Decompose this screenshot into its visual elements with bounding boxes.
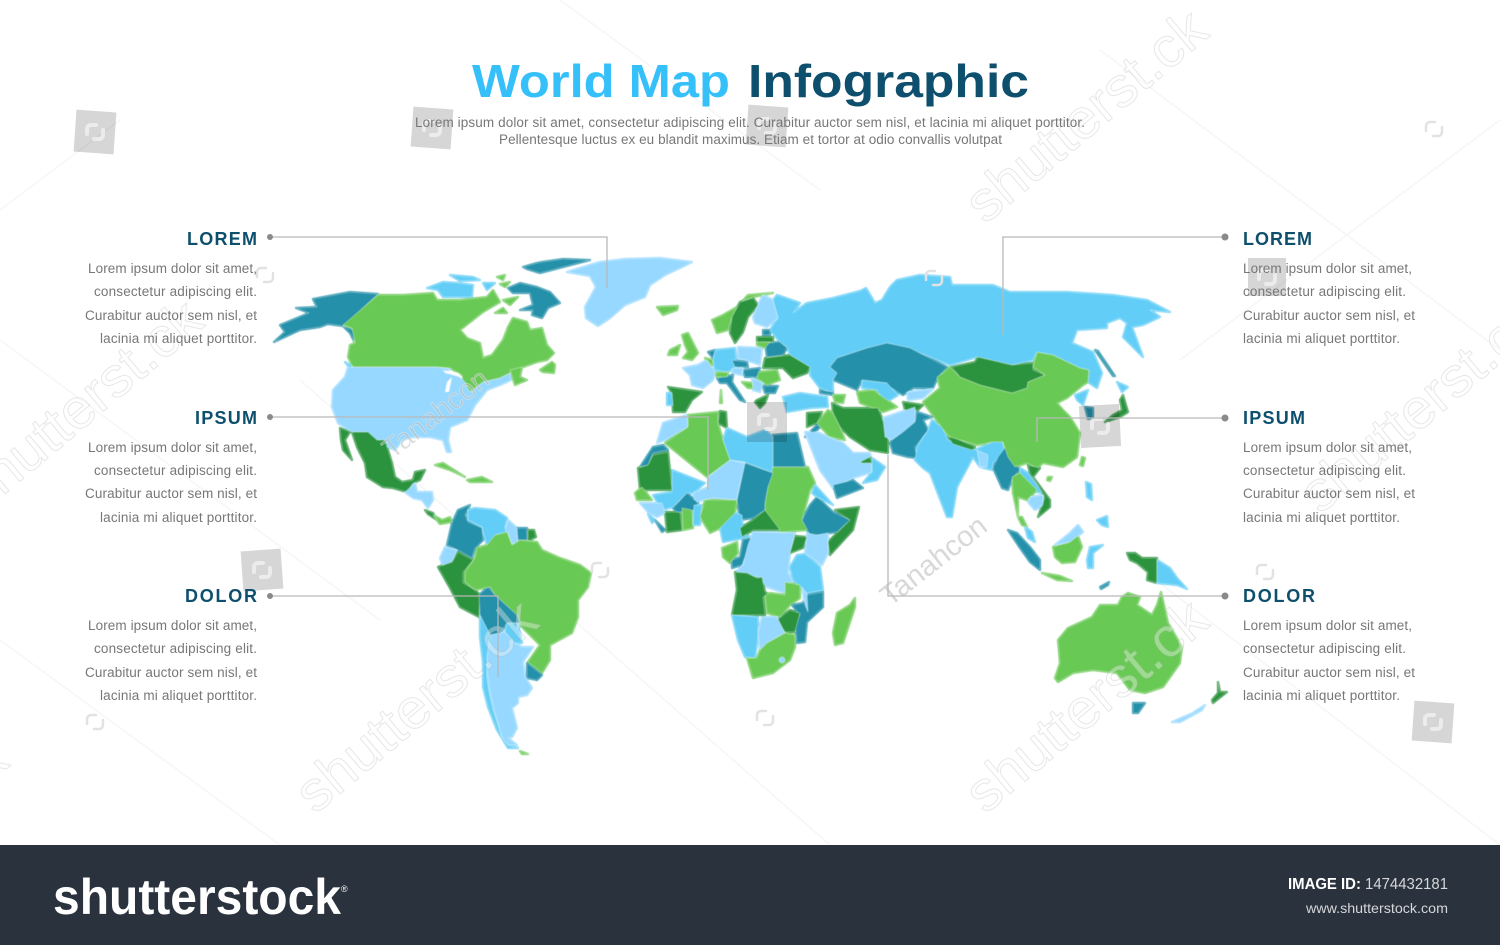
text block: right dolor: Lorem ipsum dolor sit amet, (1243, 618, 1412, 633)
footer logo: shutterstock (53, 869, 341, 925)
text block: right dolor: consectetur adipiscing elit. (1243, 641, 1406, 656)
map: Europe (657, 293, 845, 412)
text block: right lorem: Curabitur auctor sem nisl, et (1243, 308, 1415, 323)
watermark overlay: Tanahcon (377, 363, 495, 466)
text block: left ipsum: consectetur adipiscing elit. (94, 463, 257, 478)
callout: right dolor (888, 455, 1228, 600)
text block: right ipsum: Lorem ipsum dolor sit amet, (1243, 440, 1412, 455)
callout: left lorem (267, 234, 607, 288)
footer registered mark: ® (341, 884, 348, 894)
watermark overlay: shutterst.ck (952, 586, 1219, 824)
watermark overlay: shutterst.ck (282, 586, 549, 824)
text block: left dolor: lacinia mi aliquet porttitor. (100, 688, 257, 703)
callout lines (267, 234, 1228, 677)
text block: left lorem: consectetur adipiscing elit. (94, 284, 257, 299)
text block: right lorem: LOREM (1243, 229, 1312, 249)
text block: right ipsum: lacinia mi aliquet porttitor. (1243, 510, 1400, 525)
text block: left ipsum: lacinia mi aliquet porttitor. (100, 510, 257, 525)
watermark overlay: shutterst.ck (952, 0, 1219, 234)
text block: right ipsum: IPSUM (1243, 408, 1305, 428)
text block: right ipsum (1243, 408, 1415, 525)
map: Asia (805, 343, 1128, 589)
text block: right ipsum: consectetur adipiscing elit. (1243, 463, 1406, 478)
text block: left dolor: consectetur adipiscing elit. (94, 641, 257, 656)
subtitle text (415, 115, 1085, 147)
map: Oceania (1055, 553, 1227, 722)
text block: left ipsum: Lorem ipsum dolor sit amet, (88, 440, 257, 455)
text block: left lorem: LOREM (187, 229, 257, 249)
title: Infographic (748, 55, 1029, 107)
map: North America (274, 258, 692, 524)
subtitle text: Pellentesque luctus ex eu blandit maximus. Etiam et tortor at odio convallis volutpat (499, 132, 1002, 147)
text block: right lorem: consectetur adipiscing elit. (1243, 284, 1406, 299)
world map (274, 258, 1227, 754)
text block: left lorem: Curabitur auctor sem nisl, et (85, 308, 257, 323)
text block: left ipsum (85, 408, 257, 525)
callout: right lorem (1003, 234, 1228, 335)
text block: left lorem: lacinia mi aliquet porttitor. (100, 331, 257, 346)
map: Africa (635, 411, 859, 678)
text block: right lorem: lacinia mi aliquet porttitor. (1243, 331, 1400, 346)
callout: left ipsum (267, 414, 708, 490)
text block: right lorem: Lorem ipsum dolor sit amet, (1243, 261, 1412, 276)
footer url: www.shutterstock.com (1305, 900, 1448, 916)
title (472, 55, 1029, 107)
callout: right ipsum (1037, 414, 1228, 442)
text block: right dolor: DOLOR (1243, 586, 1315, 606)
text block: left dolor (85, 586, 257, 703)
footer bar (0, 845, 1500, 945)
text block: left dolor: Curabitur auctor sem nisl, et (85, 665, 257, 680)
text block: right dolor (1243, 586, 1415, 703)
text block: left lorem (85, 229, 257, 346)
map: South America (438, 505, 591, 754)
watermark overlay: Tanahcon (875, 510, 993, 613)
text block: right lorem (1243, 229, 1415, 346)
text block: left ipsum: Curabitur auctor sem nisl, et (85, 486, 257, 501)
text block: right dolor: lacinia mi aliquet porttitor. (1243, 688, 1400, 703)
text block: left dolor: DOLOR (185, 586, 257, 606)
subtitle text: Lorem ipsum dolor sit amet, consectetur adipiscing elit. Curabitur auctor sem nisl, et lacinia mi aliquet porttitor. (415, 115, 1085, 130)
text block: left ipsum: IPSUM (195, 408, 257, 428)
callout: left dolor (267, 593, 498, 677)
map: Russia (770, 275, 1170, 393)
text block: right dolor: Curabitur auctor sem nisl, et (1243, 665, 1415, 680)
title: World Map (472, 55, 730, 107)
text block: right ipsum: Curabitur auctor sem nisl, et (1243, 486, 1415, 501)
text block: left lorem: Lorem ipsum dolor sit amet, (88, 261, 257, 276)
text block: left dolor: Lorem ipsum dolor sit amet, (88, 618, 257, 633)
footer image id: IMAGE ID: 1474432181 (1288, 876, 1448, 893)
